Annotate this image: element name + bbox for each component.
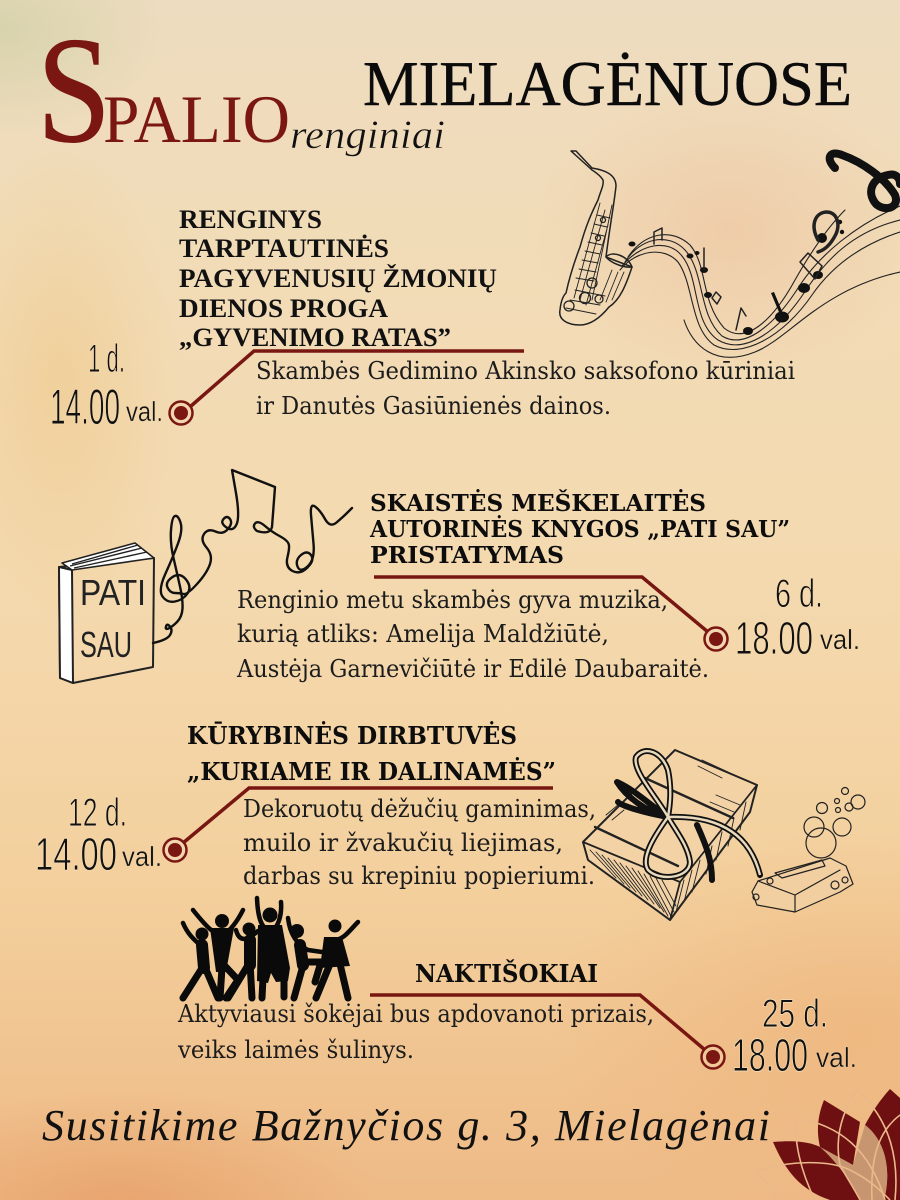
connector line and marker: [170, 351, 524, 424]
description: veiks laimės šulinys.: [177, 1036, 414, 1064]
date and time: 25 d.: [762, 992, 828, 1036]
description: Austėja Garnevičiūtė ir Edilė Daubaraitė.: [236, 655, 709, 683]
date and time: [50, 337, 163, 435]
heading: event 2: [369, 489, 790, 569]
description: [243, 795, 596, 890]
title: Spalio renginiai: [37, 6, 445, 174]
date and time: [735, 572, 860, 664]
heading: event 1: DIENOS PROGA: [179, 294, 388, 323]
description: Skambės Gedimino Akinsko saksofono kūriniai: [256, 357, 795, 385]
icon: soap and bubbles: [752, 788, 865, 912]
connector line and marker: [370, 995, 724, 1068]
title: Spalio renginiai: PALIO: [103, 81, 290, 157]
panel: event 2: [236, 489, 860, 683]
title: Spalio renginiai: S: [37, 6, 111, 174]
heading: event 4: NAKTIŠOKIAI: [415, 959, 598, 988]
date and time: 6 d.: [775, 572, 823, 616]
date and time: val.: [816, 1042, 857, 1073]
description: ir Danutės Gasiūnienės dainos.: [256, 392, 611, 420]
description: darbas su krepiniu popieriumi.: [243, 862, 595, 890]
heading: event 3: „KURIAME IR DALINAMĖS”: [187, 757, 556, 786]
date and time: val.: [126, 396, 163, 427]
panel: event 3: [35, 721, 596, 890]
heading: event 1: RENGINYS: [179, 205, 322, 234]
heading: event 2: SKAISTĖS MEŠKELAITĖS: [370, 489, 706, 517]
date and time: 14.00: [50, 379, 120, 435]
date and time: 18.00: [732, 1029, 808, 1081]
heading: event 3: KŪRYBINĖS DIRBTUVĖS: [187, 721, 517, 750]
icon: gift box: [583, 750, 760, 920]
icon: book with music: PATI: [80, 572, 146, 613]
date and time: 18.00: [735, 612, 813, 664]
description: [256, 357, 795, 420]
heading: event 1: „GYVENIMO RATAS”: [179, 323, 451, 352]
date and time: 12 d.: [68, 791, 127, 835]
description: Renginio metu skambės gyva muzika,: [237, 586, 668, 614]
icon: lotus flower: [757, 1089, 900, 1200]
heading: event 2: PRISTATYMAS: [370, 542, 564, 569]
description: kurią atliks: Amelija Maldžiūtė,: [237, 620, 609, 648]
description: Dekoruotų dėžučių gaminimas,: [243, 795, 596, 823]
icon: saxophone with music staff: [560, 151, 900, 357]
title: Spalio renginiai: renginiai: [290, 112, 445, 157]
date and time: val.: [820, 624, 860, 655]
description: [177, 1000, 654, 1064]
description: muilo ir žvakučių liejimas,: [243, 829, 563, 857]
panel: event 1: [50, 205, 795, 435]
heading: event 3: [187, 721, 556, 786]
heading: event 2: AUTORINĖS KNYGOS „PATI SAU”: [369, 515, 790, 543]
heading: event 1: TARPTAUTINĖS: [179, 234, 389, 263]
date and time: val.: [122, 841, 162, 872]
connector line and marker: [164, 788, 553, 862]
date and time: 14.00: [35, 828, 117, 880]
connector line and marker: [374, 577, 728, 650]
description: Aktyviausi šokėjai bus apdovanoti prizais,: [177, 1000, 654, 1028]
icon: book with music: [59, 470, 352, 683]
footer: address: Susitikime Bažnyčios g. 3, Mielagėnai: [42, 1101, 770, 1150]
date and time: 1 d.: [88, 337, 125, 381]
heading: event 1: [179, 205, 497, 352]
icon: dancers silhouette: [183, 898, 358, 998]
description: [236, 586, 709, 683]
panel: event 4: [177, 959, 857, 1081]
icon: book with music: SAU: [80, 624, 132, 665]
title: Mielagėnuose: MIELAGĖNUOSE: [363, 49, 852, 119]
icon: treble clef: [830, 153, 900, 208]
date and time: [35, 791, 162, 880]
date and time: [732, 992, 857, 1081]
heading: event 1: PAGYVENUSIŲ ŽMONIŲ: [179, 264, 497, 293]
